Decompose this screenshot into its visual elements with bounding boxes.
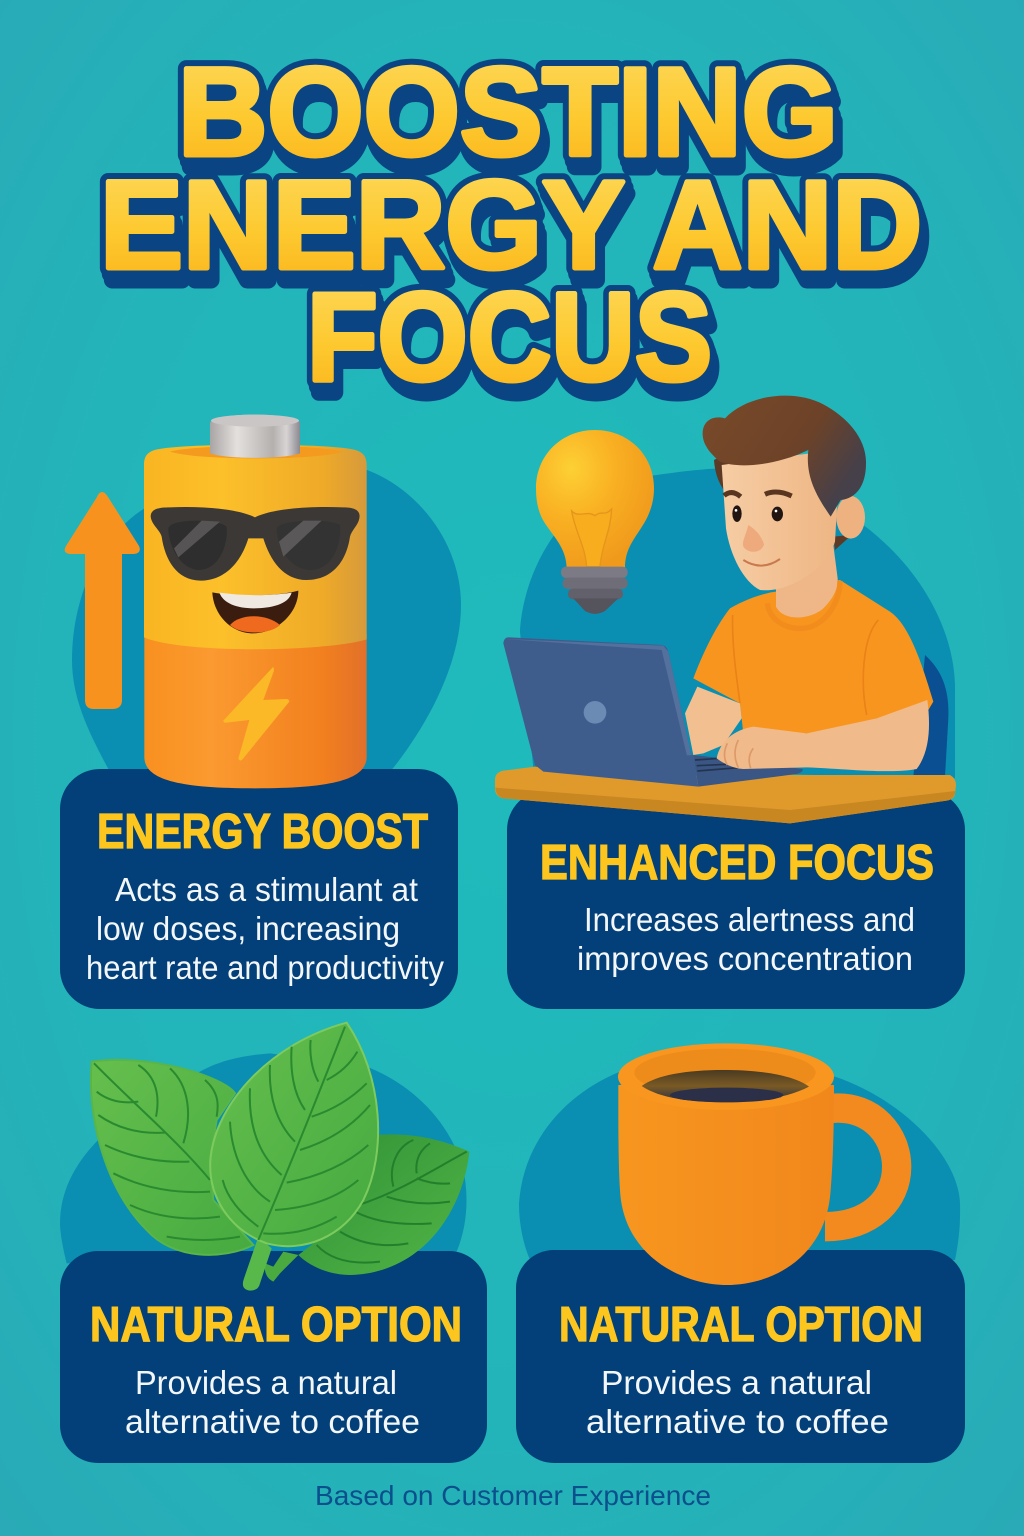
facial features xyxy=(724,492,792,566)
heading: natural option right: NATURAL OPTION xyxy=(559,1298,923,1352)
title: FOCUS xyxy=(307,268,712,407)
card: natural option right xyxy=(516,1250,965,1463)
icon: coffee mug xyxy=(618,1043,897,1285)
text: energy boost description: low doses, increasing xyxy=(96,910,400,947)
laptop screen xyxy=(503,637,698,787)
panel: energy boost xyxy=(60,415,461,1009)
text: enhanced focus description xyxy=(577,901,915,977)
desk xyxy=(495,767,956,823)
text: natural option right description xyxy=(586,1364,889,1440)
background blob: coffee xyxy=(519,1072,960,1260)
chair xyxy=(913,655,948,777)
illustration: person at laptop xyxy=(495,396,956,823)
text: natural option left description xyxy=(125,1364,420,1440)
text: energy boost description: Acts as a stimulant at xyxy=(115,871,418,908)
icon: battery with sunglasses xyxy=(144,415,367,788)
card: energy boost xyxy=(60,769,458,1009)
right arm and hand xyxy=(717,700,929,771)
icon: light bulb xyxy=(536,430,654,614)
background blob: energy xyxy=(72,470,461,772)
heading: enhanced focus: ENHANCED FOCUS xyxy=(540,836,934,890)
text: energy boost description xyxy=(86,871,444,986)
card: enhanced focus xyxy=(507,790,965,1009)
hair back xyxy=(714,452,852,550)
icon: green leaves xyxy=(91,1023,469,1291)
title: BOOSTING xyxy=(178,43,838,182)
footer note: Based on Customer Experience xyxy=(315,1480,711,1511)
text: natural option left description: alternative to coffee xyxy=(125,1403,420,1440)
card: natural option left xyxy=(60,1251,487,1463)
panel: natural option leaves xyxy=(60,1023,487,1463)
heading: energy boost: ENERGY BOOST xyxy=(97,805,428,859)
background blob: leaves xyxy=(60,1053,467,1263)
neck xyxy=(776,545,838,617)
text: natural option right description: Provides a natural xyxy=(601,1364,872,1401)
heading: natural option left: NATURAL OPTION xyxy=(90,1298,462,1352)
title: BOOSTING xyxy=(178,43,838,182)
shirt xyxy=(693,580,933,733)
left arm xyxy=(685,687,742,755)
title: ENERGY AND xyxy=(100,156,922,295)
title: FOCUS xyxy=(307,268,712,407)
panel: natural option coffee xyxy=(516,1043,965,1463)
ear xyxy=(836,496,865,539)
text: natural option left description: Provides a natural xyxy=(135,1364,397,1401)
text: enhanced focus description: improves concentration xyxy=(577,940,913,977)
hair xyxy=(703,396,866,517)
title xyxy=(100,43,922,407)
title: ENERGY AND xyxy=(100,156,922,295)
background blob: focus xyxy=(520,468,955,778)
panel: enhanced focus xyxy=(495,396,965,1009)
arrow: upward xyxy=(65,492,140,709)
face xyxy=(722,453,838,590)
text: natural option right description: alternative to coffee xyxy=(586,1403,889,1440)
text: enhanced focus description: Increases alertness and xyxy=(584,901,915,938)
text: energy boost description: heart rate and productivity xyxy=(86,949,444,986)
laptop base xyxy=(693,755,803,787)
